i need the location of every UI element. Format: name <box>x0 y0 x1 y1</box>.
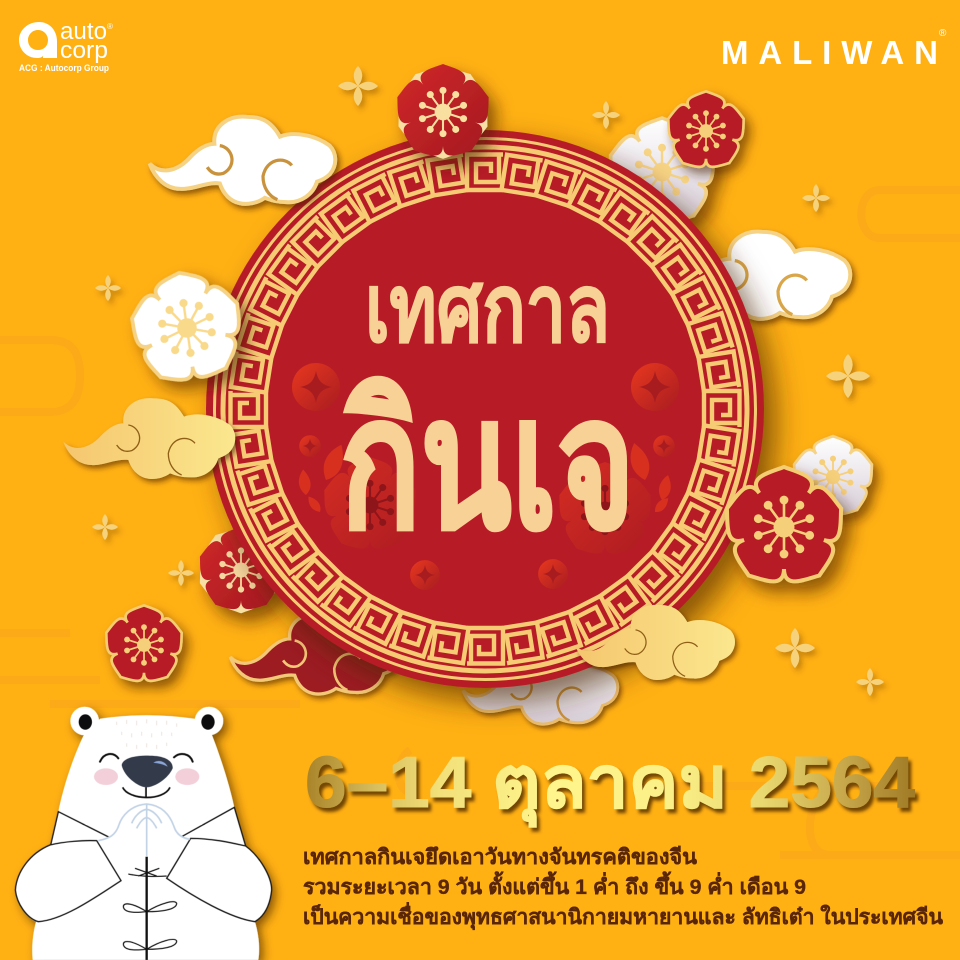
nose highlight <box>153 761 168 767</box>
forehead fur marks <box>117 719 177 749</box>
flower: white behind disc, top right <box>611 118 713 221</box>
praying hands <box>98 804 190 856</box>
cream petals behind <box>185 511 300 626</box>
eyes <box>100 754 193 762</box>
flower: top right red <box>668 91 744 167</box>
main red disc <box>206 130 764 688</box>
description line 3: เป็นความเชื่อของพุทธศาสนานิกายมหายานและ ลัทธิเต๋า ในประเทศจีน <box>303 901 944 931</box>
logo: Maliwan <box>721 28 947 71</box>
background cloud-line pattern <box>0 190 960 855</box>
logo wordmark auto: auto <box>60 18 107 45</box>
logo: autocorp <box>19 18 113 73</box>
cloud: bottom right gold <box>575 605 735 680</box>
disc base <box>206 130 764 688</box>
description text <box>303 845 944 931</box>
date heading: 6–14 ตุลาคม 2564 <box>305 743 915 828</box>
logo registered mark: ® <box>107 22 113 31</box>
stamens <box>219 547 263 593</box>
description line 1: เทศกาลกินเจยึดเอาวันทางจันทรคติของจีน <box>303 845 698 869</box>
flower: top red over gold <box>382 48 507 172</box>
description line 2: รวมระยะเวลา 9 วัน ตั้งแต่ขึ้น 1 ค่ำ ถึง ขึ้น 9 ค่ำ เดือน 9 <box>303 871 806 899</box>
ears <box>79 714 215 730</box>
flower: lower left small red <box>106 605 182 681</box>
flower: right white small <box>794 436 872 514</box>
cloud: bottom red behind disc <box>230 614 401 694</box>
cloud: right white behind disc <box>665 232 850 319</box>
sparkles <box>92 66 884 696</box>
title line 2: กินเจ <box>340 363 635 566</box>
Maliwan registered mark: ® <box>939 28 947 39</box>
logo mark <box>19 22 57 58</box>
gold backing <box>382 48 507 172</box>
flower: left white <box>127 265 247 385</box>
Maliwan wordmark: MALIWAN <box>721 34 938 71</box>
logo wordmark corp: corp <box>60 37 108 64</box>
collar and arms <box>15 807 272 922</box>
cloud: bottom white behind disc <box>463 651 618 724</box>
flower: red behind disc, lower left <box>185 511 300 626</box>
disc inner decoration: coins, leaves and tonal flowers <box>292 363 679 590</box>
red petals <box>397 64 489 156</box>
cloud: top left white <box>150 117 335 204</box>
meander key border <box>230 154 740 664</box>
nose <box>122 756 173 787</box>
mouth <box>123 787 170 798</box>
polar bear mascot <box>15 707 272 960</box>
logo tagline: ACG : Autocorp Group <box>19 63 109 73</box>
title line 1: เทศกาล <box>365 256 610 361</box>
flower: right big red <box>727 467 841 581</box>
stamens <box>419 87 467 137</box>
red petals <box>200 527 282 609</box>
bear silhouette <box>15 707 272 960</box>
shirt placket and frog buttons <box>123 857 177 960</box>
cloud: left gold <box>63 398 235 479</box>
cheeks <box>94 768 199 785</box>
outer gold rings <box>214 138 756 680</box>
